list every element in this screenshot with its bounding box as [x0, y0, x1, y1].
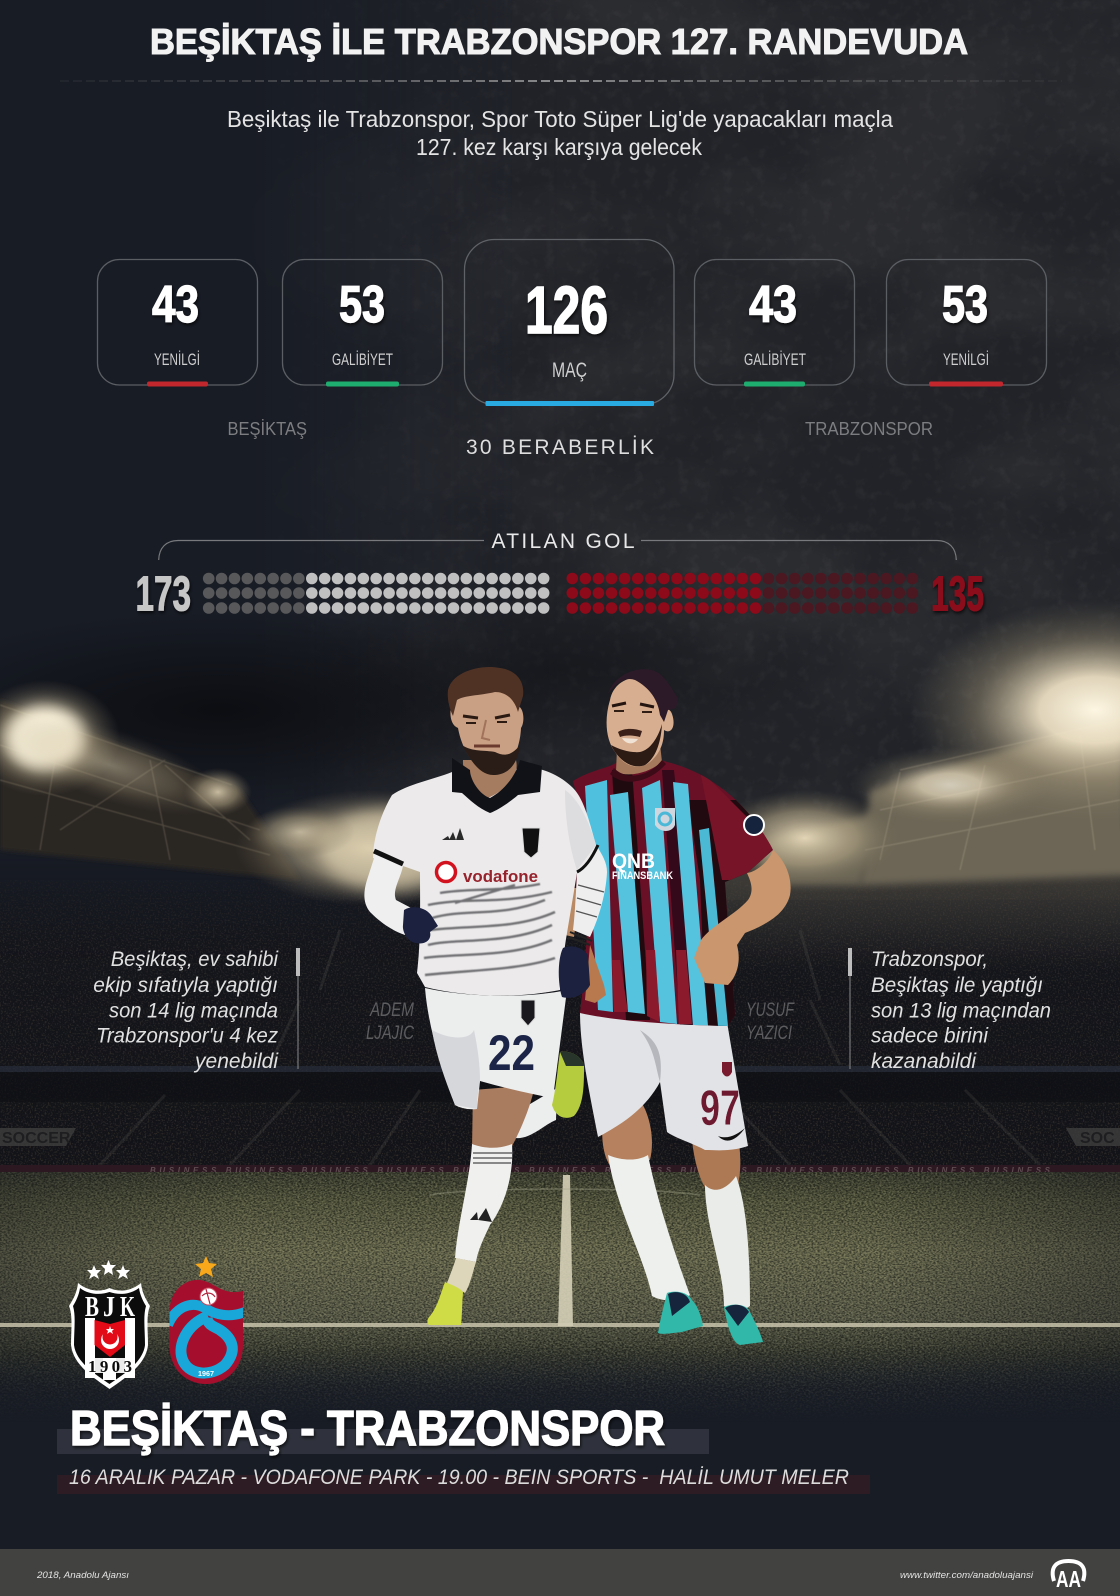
player name: Yusuf Yazici [746, 1000, 795, 1044]
card: total matches: 126 [525, 273, 608, 348]
Trabzonspor goal count: 135 [931, 568, 984, 622]
goals chart [136, 530, 984, 622]
card: Trabzonspor defeats [886, 260, 1046, 386]
background: grandstand crowd: BUSINESS BUSINESS BUSINESS BUSINESS BUSINESS BUSINESS BUSINESS BUSINESS BUSINESS BUSINESS BUSINESS BUSINESS [150, 1166, 1051, 1175]
card: Trabzonspor wins [694, 260, 854, 386]
callout: Trabzonspor note: kazanabildi [871, 1050, 977, 1073]
callout: Trabzonspor note: sadece birini [871, 1024, 989, 1048]
crest: Beşiktaş: J [103, 1292, 115, 1323]
team and draw labels: BEŞİKTAŞ [228, 419, 307, 439]
neck [463, 760, 517, 798]
card: Trabzonspor wins: 43 [749, 276, 797, 334]
shorts [425, 988, 567, 1109]
background: grandstand crowd [0, 850, 1120, 1175]
player name: Adem Ljajic [366, 1000, 414, 1044]
background: stadium roofs and floodlights [0, 600, 1120, 906]
player name: Yusuf Yazici: YAZICI [746, 1023, 793, 1044]
collar and neck [616, 744, 662, 774]
player name: Yusuf Yazici: YUSUF [746, 1000, 795, 1021]
Trabzonspor goal dots [572, 578, 913, 608]
club badge [655, 808, 675, 831]
arm [694, 850, 791, 985]
footer bar: 2018, Anadolu Ajansı [36, 1570, 129, 1581]
head [607, 677, 674, 767]
head [450, 684, 523, 772]
callout: Beşiktaş note: yenebildi [193, 1050, 279, 1073]
player name: Adem Ljajic: ADEM [369, 1000, 414, 1021]
boots [658, 1292, 703, 1334]
callout: Beşiktaş note [93, 948, 300, 1073]
shorts number: 97 [700, 1080, 740, 1136]
team and draw labels: TRABZONSPOR [805, 419, 933, 439]
crest: Trabzonspor: 1967 [198, 1371, 214, 1378]
shirt [573, 760, 773, 1026]
background: dark sky [48, 0, 1120, 814]
far arm behind Beşiktaş player [557, 845, 580, 937]
card: Beşiktaş defeats: 43 [152, 276, 199, 334]
team and draw labels [228, 419, 933, 459]
callout: Trabzonspor note: son 13 lig maçından [871, 1000, 1051, 1022]
long sleeve left [364, 852, 415, 935]
background: grass pitch with lines [0, 1172, 1120, 1422]
callout: Trabzonspor note: Trabzonspor, [871, 948, 988, 971]
legs and socks [602, 1100, 652, 1168]
stat cards [98, 240, 1046, 406]
callout: Beşiktaş note: ekip sıfatıyla yaptığı [93, 974, 278, 997]
shirt torso [373, 768, 597, 996]
fingers by glove [585, 945, 606, 1003]
back leg and boot [515, 1088, 557, 1138]
club badge [522, 828, 540, 858]
callout: Trabzonspor note: Beşiktaş ile yaptığı [871, 974, 1043, 997]
kit maker mark [442, 828, 464, 840]
callout: Beşiktaş note: Beşiktaş, ev sahibi [111, 948, 279, 971]
shirt sponsor: FINANSBANK [612, 870, 673, 882]
crest: Trabzonspor [168, 1256, 245, 1384]
goals heading: ATILAN GOL [492, 530, 634, 553]
shirt sponsor [436, 862, 538, 886]
shorts [580, 1012, 748, 1150]
title: BEŞİKTAŞ İLE TRABZONSPOR 127. RANDEVUDA [150, 21, 968, 62]
glove left [403, 907, 438, 943]
crest: Beşiktaş: K [120, 1292, 135, 1323]
match title with band: BEŞİKTAŞ - TRABZONSPOR [70, 1402, 665, 1456]
footer bar: www.twitter.com/anadoluajansi [900, 1570, 1034, 1581]
shirt sponsor: vodafone [463, 867, 538, 886]
card: total matches: MAÇ [552, 359, 587, 382]
card: Beşiktaş wins: 53 [339, 276, 385, 334]
callout: Beşiktaş note: Trabzonspor'u 4 kez [96, 1024, 278, 1048]
player: Adem Ljajic in Beşiktaş kit [364, 667, 607, 1325]
callout: Beşiktaş note: son 14 lig maçında [109, 1000, 278, 1022]
callout: Trabzonspor note [848, 948, 1051, 1073]
card: Beşiktaş wins: GALİBİYET [332, 350, 393, 369]
match details with band: 16 ARALIK PAZAR - VODAFONE PARK - 19.00 - BEIN SPORTS - HALİL UMUT MELER [69, 1466, 849, 1489]
shirt sponsor: QNB [612, 850, 655, 873]
collar [452, 758, 542, 813]
icon: Anadolu Agency logo [1053, 1561, 1084, 1592]
card: Beşiktaş defeats [98, 260, 258, 386]
card: total matches [464, 240, 674, 406]
team and draw labels: 30 BERABERLİK [466, 436, 654, 459]
card: Beşiktaş wins [282, 260, 442, 386]
front leg [472, 1085, 535, 1150]
shorts details [722, 1062, 732, 1076]
crest: Beşiktaş: 1903 [88, 1357, 132, 1376]
card: Trabzonspor defeats: 53 [942, 276, 988, 334]
card: Beşiktaş defeats: YENİLGİ [154, 350, 200, 369]
card: Trabzonspor defeats: YENİLGİ [943, 350, 989, 369]
background: grandstand crowd: SOCCER [2, 1130, 71, 1147]
Beşiktaş goal dots [209, 578, 544, 608]
crest: Beşiktaş [69, 1260, 150, 1389]
glove right [559, 946, 590, 998]
player: Yusuf Yazici in Trabzonspor kit [553, 669, 791, 1345]
intro text: Beşiktaş ile Trabzonspor, Spor Toto Süper Lig'de yapacakları maçla [227, 106, 893, 132]
Beşiktaş goal count: 173 [136, 568, 191, 622]
background: grandstand crowd: SOC [1080, 1130, 1115, 1147]
icon: Anadolu Agency logo: AA [1056, 1566, 1081, 1592]
card: Trabzonspor wins: GALİBİYET [744, 350, 806, 369]
player name: Adem Ljajic: LJAJIC [366, 1023, 414, 1044]
shorts number: 22 [488, 1025, 535, 1081]
long sleeve right [573, 846, 607, 937]
crest: Beşiktaş: B [85, 1292, 99, 1323]
shirt sponsor [612, 850, 673, 882]
intro text: 127. kez karşı karşıya gelecek [416, 134, 702, 160]
footer bar [0, 1549, 1120, 1596]
intro text [227, 106, 893, 160]
front boot [427, 1282, 463, 1325]
